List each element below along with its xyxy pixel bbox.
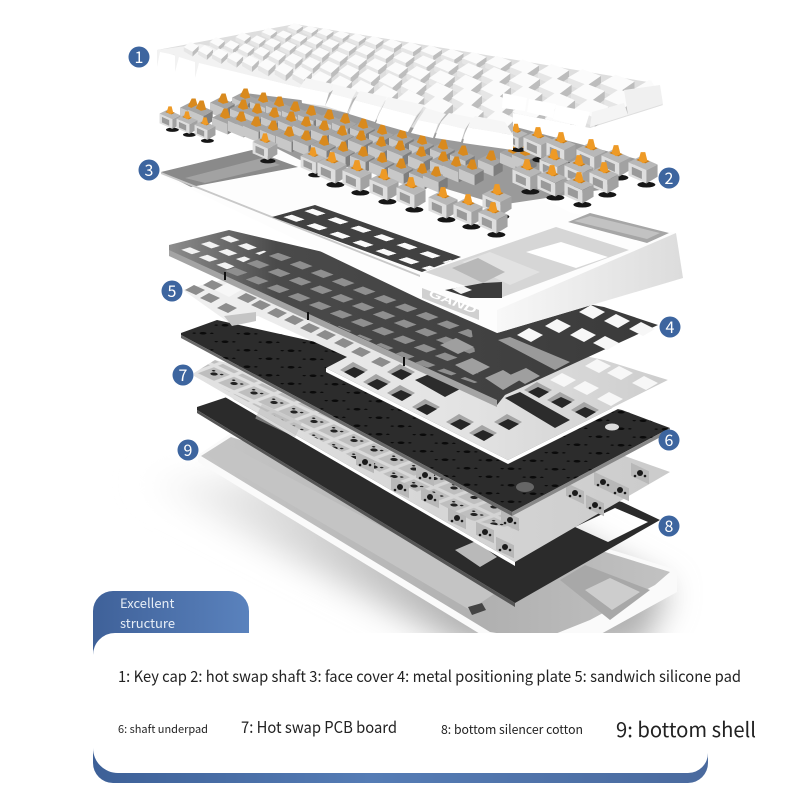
background shadow <box>140 470 670 650</box>
part 6: shaft underpad <box>181 320 670 516</box>
number badge 6: 6 <box>665 427 674 451</box>
number badge 4 <box>660 314 680 338</box>
number badge 5: 5 <box>168 278 177 302</box>
number badge 8: 8 <box>665 513 674 537</box>
part 2: hot swap shaft switches <box>160 88 658 238</box>
number badge 2: 2 <box>665 165 674 189</box>
number badge 9 <box>178 437 198 461</box>
legend line 1: 1: Key cap 2: hot swap shaft 3: face cover 4: metal positioning plate 5: sandwich silicone pad <box>118 665 741 687</box>
number badge 2 <box>658 165 680 189</box>
number badge 6 <box>658 427 680 451</box>
number badge 3 <box>138 157 160 181</box>
heading text: structure <box>120 613 175 632</box>
legend item 6: 6: shaft underpad <box>118 721 208 737</box>
number badge 9: 9 <box>184 437 193 461</box>
part 1: key caps <box>157 23 669 150</box>
legend item 7: 7: Hot swap PCB board <box>241 714 397 738</box>
number badge 7 <box>172 362 194 386</box>
number badge 1 <box>128 44 150 68</box>
part 7: hot swap PCB board <box>194 360 670 566</box>
number badge 8 <box>658 513 680 537</box>
number badge 7: 7 <box>179 362 188 386</box>
blue bar behind panel <box>93 660 708 783</box>
number badge 3: 3 <box>145 157 153 181</box>
legend item 9: 9: bottom shell <box>616 713 756 743</box>
legend item 8: 8: bottom silencer cotton <box>441 719 583 738</box>
part 3: face cover <box>161 140 683 333</box>
part 9: bottom shell <box>198 433 677 640</box>
number badge 5 <box>162 278 182 302</box>
number badge 1: 1 <box>135 44 143 68</box>
part 8: bottom silencer cotton <box>197 397 660 607</box>
blue heading tab <box>93 591 249 660</box>
logo: GAND <box>427 288 478 317</box>
part 4: metal positioning plate <box>169 230 658 407</box>
number badge 4: 4 <box>666 314 675 338</box>
heading text: Excellent <box>120 593 174 612</box>
part 5: sandwich silicone pad <box>183 280 668 464</box>
white legend panel <box>93 633 800 773</box>
